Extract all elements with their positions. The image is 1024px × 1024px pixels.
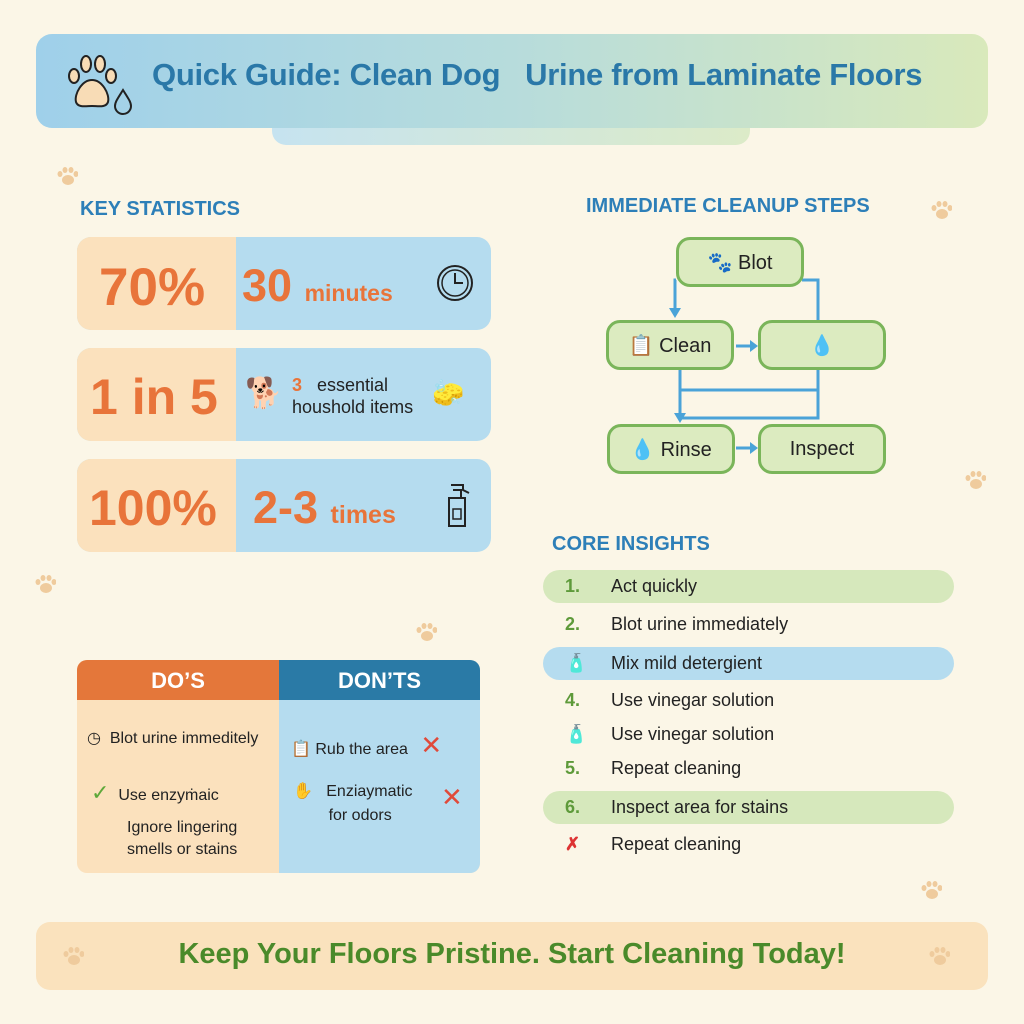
stat card 1 bbox=[77, 237, 491, 330]
step: clean bbox=[606, 320, 734, 370]
insights list: Use vinegar solution bbox=[611, 690, 774, 710]
step: inspect bbox=[758, 424, 886, 474]
stat card 2: 3 essential bbox=[292, 375, 388, 395]
insights list: 1. bbox=[565, 576, 580, 596]
insights list: Repeat cleaning bbox=[611, 834, 741, 854]
insights list: 🧴 bbox=[565, 724, 587, 744]
footer text: Keep Your Floors Pristine. Start Cleaning Today! bbox=[178, 938, 846, 970]
do's header: DO’S bbox=[151, 668, 205, 693]
insights list: 🧴 bbox=[565, 653, 587, 673]
don'ts header: DON’TS bbox=[338, 668, 421, 693]
step: rinse: 💧 Rinse bbox=[630, 438, 712, 460]
stat card 2 bbox=[77, 348, 491, 441]
step: blot bbox=[676, 237, 804, 287]
insights list: Inspect area for stains bbox=[611, 797, 788, 817]
step: drop bbox=[758, 320, 886, 370]
icon: clock bbox=[437, 265, 473, 301]
stat card 1: 70% bbox=[99, 258, 205, 317]
icon: sponge: 🧽 bbox=[432, 378, 464, 408]
do's header bbox=[77, 660, 279, 700]
icon: dog: 🐕 bbox=[245, 377, 282, 410]
step: blot: 🐾 Blot bbox=[708, 252, 772, 274]
title text: Quick Guide: Clean Dog Urine from Laminate Floors bbox=[152, 57, 922, 92]
insights list: 4. bbox=[565, 690, 580, 710]
insights list: Blot urine immediately bbox=[611, 614, 788, 634]
don'ts items: 📋 Rub the area ✕ bbox=[291, 730, 442, 760]
insights list: 5. bbox=[565, 758, 580, 778]
panel: do's and don'ts: ✋ Enziaymatic bbox=[293, 783, 413, 800]
panel: do's and don'ts: for odors bbox=[329, 807, 392, 824]
stat card 3 bbox=[77, 459, 491, 552]
heading: core insights: CORE INSIGHTS bbox=[552, 533, 710, 555]
stat card 2: 1 in 5 bbox=[90, 369, 218, 425]
stat card 3: 100% bbox=[89, 480, 217, 536]
stat card 3: 2-3 times bbox=[253, 482, 396, 533]
panel: do's and don'ts: Ignore lingering bbox=[127, 819, 237, 836]
panel: do's and don'ts: smells or stains bbox=[127, 841, 237, 858]
title banner bbox=[36, 34, 988, 128]
panel: do's and don'ts bbox=[77, 660, 480, 873]
stat card 2: houshold items bbox=[292, 397, 413, 417]
icon: paw with drop bbox=[68, 55, 132, 115]
insights list bbox=[543, 570, 954, 854]
step: clean: 📋 Clean bbox=[629, 334, 711, 356]
panel: do's and don'ts: ✓ Use enzyṁaic bbox=[91, 780, 219, 805]
flowchart arrows bbox=[669, 278, 820, 454]
do's items: ◷ Blot urine immeditely bbox=[87, 730, 258, 747]
insights list: 6. bbox=[565, 797, 580, 817]
footer banner bbox=[36, 922, 988, 990]
panel: do's and don'ts: ✕ bbox=[441, 782, 463, 812]
insights list: ✗ bbox=[565, 834, 580, 854]
step: rinse bbox=[607, 424, 735, 474]
heading: immediate cleanup steps: IMMEDIATE CLEANUP STEPS bbox=[586, 195, 870, 217]
heading: key statistics: KEY STATISTICS bbox=[80, 198, 240, 220]
insights list: Use vinegar solution bbox=[611, 724, 774, 744]
stat card 1: 30 minutes bbox=[242, 260, 393, 311]
header tab bbox=[272, 110, 750, 145]
insights list: 2. bbox=[565, 614, 580, 634]
insights list: Repeat cleaning bbox=[611, 758, 741, 778]
step: inspect: Inspect bbox=[790, 438, 854, 460]
icon: spray bottle bbox=[448, 484, 470, 527]
step: drop: 💧 bbox=[810, 334, 834, 356]
insights list: Act quickly bbox=[611, 576, 697, 596]
insights list: Mix mild detergient bbox=[611, 653, 762, 673]
don'ts header bbox=[279, 660, 480, 700]
